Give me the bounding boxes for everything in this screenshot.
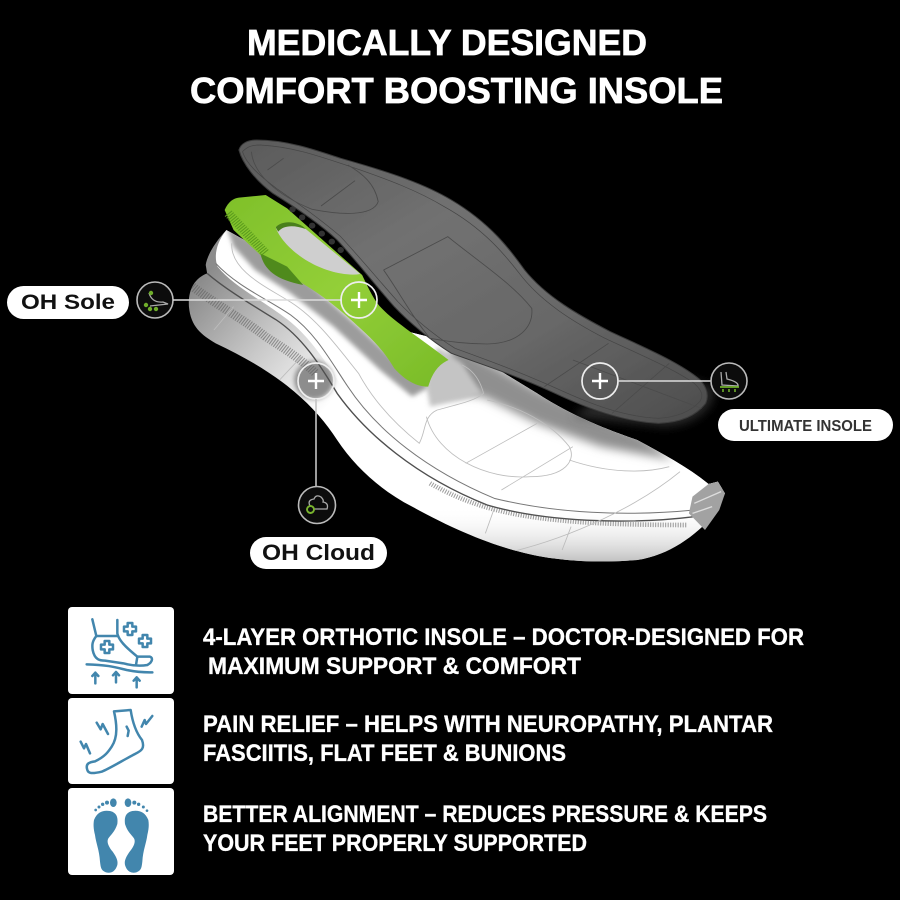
pill: Ultimate Insole label xyxy=(718,409,893,441)
midsole groove lines xyxy=(207,263,694,521)
connector line xyxy=(315,399,317,486)
title: MEDICALLY DESIGNED xyxy=(247,22,647,63)
text: benefit 3: BETTER ALIGNMENT – REDUCES PRESSURE & KEEPS xyxy=(203,801,767,828)
icon: foot with plus signs xyxy=(68,607,174,694)
midsole: white base layer xyxy=(189,227,734,567)
text: benefit 1 xyxy=(203,624,804,680)
icon: sock foot with pain bolts xyxy=(68,698,174,784)
icon: insole badge xyxy=(711,363,747,399)
pill: OH Sole label xyxy=(7,286,129,319)
connector line xyxy=(173,299,342,301)
white top surface xyxy=(216,230,722,488)
icon: cloud badge xyxy=(298,486,336,524)
plus marker on arch xyxy=(341,282,377,318)
shadows cast by upper layers xyxy=(430,343,673,460)
ultimate insole: dark top layer xyxy=(239,140,714,427)
pill: OH Cloud label: OH Cloud xyxy=(262,540,375,565)
green arch support xyxy=(225,195,449,387)
title xyxy=(190,22,723,111)
text: benefit 2: FASCIITIS, FLAT FEET & BUNIONS xyxy=(203,740,566,767)
toe cap xyxy=(689,482,725,530)
text: benefit 2: PAIN RELIEF – HELPS WITH NEUROPATHY, PLANTAR xyxy=(203,711,773,738)
midsole contour lines xyxy=(214,243,680,552)
pill: OH Sole label: OH Sole xyxy=(21,291,115,314)
panel: benefit 2 xyxy=(68,698,773,784)
icon: two footprints xyxy=(68,788,174,875)
text: benefit 1: MAXIMUM SUPPORT & COMFORT xyxy=(208,653,581,680)
text: benefit 2 xyxy=(203,711,773,767)
shade behind lower plus marker xyxy=(294,361,334,399)
callout: OH Sole xyxy=(7,282,377,319)
panel: benefit 3 xyxy=(68,788,767,875)
title: COMFORT BOOSTING INSOLE xyxy=(190,70,723,111)
plus marker on midsole xyxy=(298,363,334,399)
bottom edge shading xyxy=(430,516,702,562)
text: benefit 1: 4-LAYER ORTHOTIC INSOLE – DOCTOR-DESIGNED FOR xyxy=(203,624,804,651)
plus marker on insole xyxy=(582,363,618,399)
exploded insole illustration xyxy=(189,140,734,567)
pill: Ultimate Insole label: ULTIMATE INSOLE xyxy=(739,418,872,435)
text: benefit 3: YOUR FEET PROPERLY SUPPORTED xyxy=(203,830,587,857)
panel: benefit 1 xyxy=(68,607,804,694)
callout: Ultimate Insole xyxy=(582,363,893,441)
callout: OH Cloud xyxy=(250,363,387,569)
icon: OH Sole badge xyxy=(137,282,173,318)
text: benefit 3 xyxy=(203,801,767,857)
midsole hatch shading xyxy=(192,287,687,525)
pill: OH Cloud label xyxy=(250,537,387,569)
connector line xyxy=(618,380,711,382)
